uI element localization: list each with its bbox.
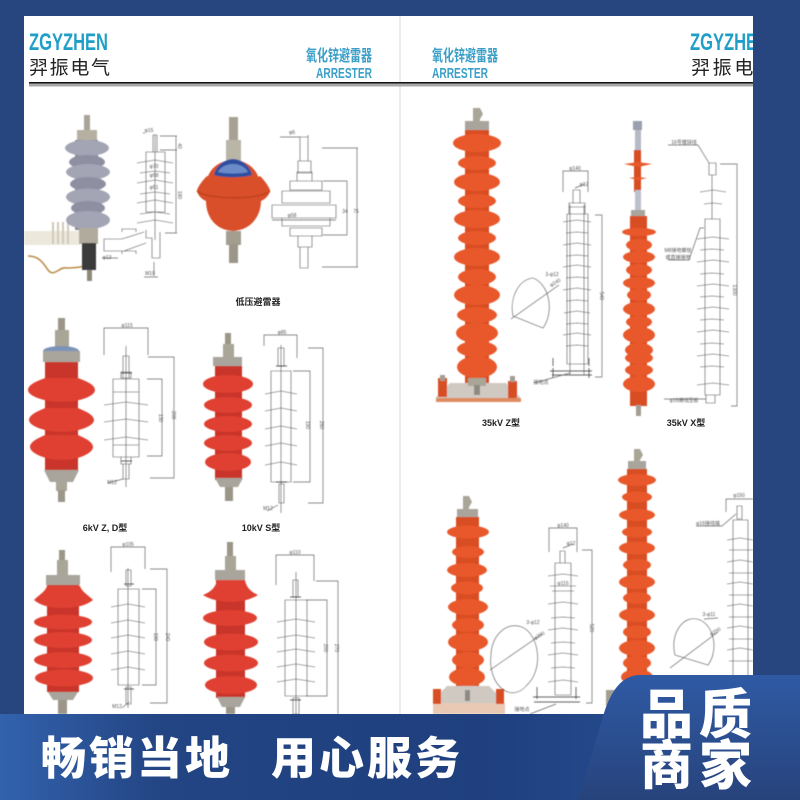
labels: [289, 550, 339, 652]
labels: φ110: [289, 550, 301, 556]
labels: φ85: [278, 330, 287, 336]
caption: 6kV Z, D type: 6kV Z, D型: [83, 522, 127, 533]
drawing: low-voltage arrester dimensions: [272, 130, 359, 268]
logo Chinese name left: 羿振电气: [29, 53, 110, 80]
ARRESTER left: ARRESTER: [316, 65, 372, 82]
header rule right: [400, 82, 753, 86]
labels: [514, 523, 594, 713]
product: 10kV arrester: [203, 333, 253, 501]
labels: M12: [107, 480, 117, 486]
product title left: 氧化锌避雷器: [306, 46, 372, 65]
header rule left: [29, 82, 400, 86]
labels: φ140: [557, 523, 569, 529]
labels: [288, 130, 359, 219]
caption: 35kV X type: 35kV X型: [667, 417, 705, 428]
product: 10kV lower-middle arrester: [203, 542, 258, 714]
labels: M12: [112, 704, 122, 710]
labels: 208: [170, 411, 176, 419]
labels: [263, 330, 324, 512]
labels: 200: [322, 644, 328, 652]
labels: M10: [145, 271, 155, 277]
labels: 1300: [731, 284, 737, 296]
labels: φ12: [567, 541, 576, 547]
labels: 520: [588, 624, 594, 632]
drawing: 35kV lower Z dimensions: [490, 523, 594, 714]
drawing: 35kV X dimensions: [664, 139, 737, 406]
labels: φ58: [288, 213, 297, 219]
labels: φ105: [122, 542, 134, 548]
labels: 34: [342, 209, 348, 215]
labels: [107, 323, 176, 486]
labels: 260: [318, 421, 324, 429]
drawing: lower-middle dimensions: [276, 550, 339, 714]
labels: 接地点: [514, 706, 530, 713]
product: 35kV X arrester: [622, 121, 656, 416]
labels: M8接地螺栓: [665, 247, 691, 254]
product: 6kV arrester: [28, 318, 95, 502]
labels: M12: [263, 506, 273, 512]
labels: [103, 128, 182, 277]
slogan: 畅销当地: 畅销当地: [41, 722, 233, 787]
labels: φ70: [150, 164, 159, 170]
product: 35kV lower X arrester: [606, 449, 656, 714]
labels: [112, 542, 170, 710]
bottom banner: [0, 714, 800, 800]
left header: [29, 29, 400, 86]
labels: φ12: [580, 182, 589, 188]
labels: φ15: [145, 128, 154, 134]
ARRESTER right: ARRESTER: [432, 65, 488, 82]
labels: [533, 166, 604, 386]
product: 6kV lower-left arrester: [34, 550, 93, 714]
caption: 10kV S type: 10kV S型: [242, 522, 280, 533]
labels: 或直接接地: [665, 254, 691, 261]
labels: φ13: [103, 255, 112, 261]
labels: 190: [304, 421, 310, 429]
labels: 3-φ12: [545, 272, 559, 278]
labels: φ51: [150, 185, 159, 191]
drawing: 35kV lower X dimensions: [670, 493, 753, 714]
labels: φ150: [733, 493, 745, 499]
labels: 130: [157, 414, 163, 422]
drawing: 6kV dimensions: [104, 323, 176, 487]
labels: 180: [176, 191, 182, 199]
badge: [578, 673, 800, 800]
labels: 540: [598, 292, 604, 300]
drawing: 10kV dimensions: [263, 330, 324, 513]
labels: φ200: [533, 631, 546, 642]
labels: φ58: [150, 173, 159, 179]
labels: [665, 139, 737, 404]
product title right: 氧化锌避雷器: [432, 46, 498, 65]
drawing: 35kV Z dimensions: [511, 166, 604, 386]
caption: 35kV Z type: 35kV Z型: [482, 417, 520, 428]
labels: φ240: [549, 278, 562, 289]
labels: φ140: [569, 166, 581, 172]
drawing: grey arrester dimensions: [102, 128, 182, 277]
product: grey arrester: [24, 115, 110, 281]
slogan: 用心服务: 用心服务: [271, 722, 463, 787]
caption: low-voltage arrester: 低压避雷器: [235, 296, 281, 307]
right header: [400, 33, 753, 86]
labels: 3-φ11: [703, 612, 716, 618]
logo Chinese name right: 羿振电气: [691, 53, 775, 80]
labels: 接地点: [533, 379, 549, 386]
labels: φ16接线压板: [670, 397, 698, 404]
labels: [696, 493, 745, 638]
product: 35kV lower Z arrester: [433, 496, 505, 714]
labels: φ115: [121, 323, 133, 329]
labels: 190: [152, 633, 158, 641]
labels: 75: [353, 209, 359, 215]
logo: ZGYZHEN left: ZGYZHEN: [29, 29, 108, 56]
labels: 16号镀锌线: [671, 139, 697, 146]
labels: 3-φ12: [526, 620, 540, 626]
labels: 40: [176, 143, 182, 149]
labels: 240: [164, 633, 170, 641]
product: 35kV Z arrester: [436, 108, 521, 402]
drawing: lower-left dimensions: [111, 542, 170, 710]
badge text: 商家: 商家: [640, 724, 758, 800]
product: low-voltage arrester: [197, 117, 270, 263]
badge text: 品质: 品质: [640, 673, 758, 749]
labels: φ115: [557, 581, 569, 587]
labels: 270: [333, 644, 339, 652]
labels: φ6: [289, 130, 295, 136]
labels: φ200: [709, 627, 722, 638]
labels: φ16接线端: [696, 520, 720, 527]
